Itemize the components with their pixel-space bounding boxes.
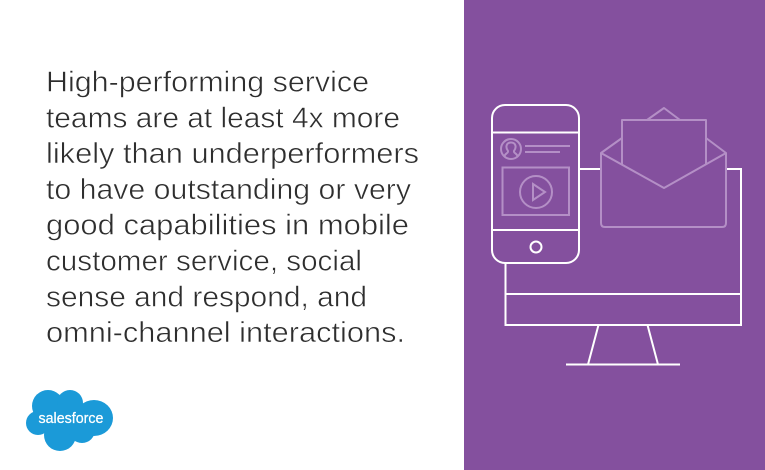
panel: white background [0, 0, 464, 470]
letter sheet [622, 120, 706, 165]
monitor screen outline [506, 169, 741, 325]
text block: main statement: customer service, social [46, 246, 362, 278]
phone screen content [501, 139, 570, 215]
envelope body [601, 153, 726, 227]
panel: purple background [464, 0, 765, 470]
text block: main statement: omni-channel interactions. [46, 317, 405, 349]
text block: main statement: sense and respond, and [46, 281, 367, 313]
connector: phone to envelope [579, 168, 601, 170]
icon: open envelope [601, 108, 726, 227]
text block: main statement: likely than underperformers [46, 138, 419, 170]
monitor base [566, 364, 680, 366]
phone screen dividers [492, 132, 579, 230]
text block: main statement: teams are at least 4x more [46, 102, 400, 134]
envelope back flap [601, 108, 726, 153]
icon: cloud shape [26, 390, 113, 451]
message lines [525, 146, 570, 152]
icon: desktop monitor [506, 169, 741, 364]
icon: user avatar [501, 139, 521, 159]
text block: main statement: High-performing service [46, 66, 369, 98]
text block: main statement [46, 66, 419, 349]
icon: play button [520, 176, 552, 208]
logo: salesforce cloud [26, 390, 113, 451]
monitor bezel line [506, 293, 741, 295]
logo wordmark: salesforce [38, 410, 104, 427]
phone home button [530, 242, 542, 252]
text block: main statement: good capabilities in mobile [46, 210, 409, 242]
video frame [502, 168, 569, 215]
phone body [492, 105, 579, 263]
monitor stand [588, 325, 658, 364]
text block: main statement: to have outstanding or very [46, 174, 412, 206]
icon: smartphone [492, 105, 579, 263]
